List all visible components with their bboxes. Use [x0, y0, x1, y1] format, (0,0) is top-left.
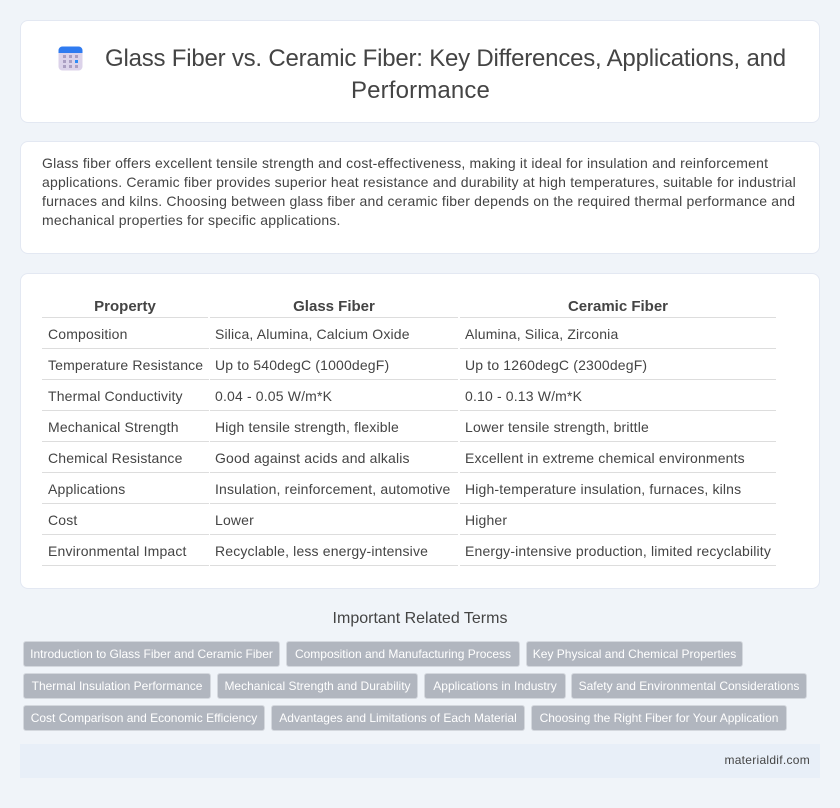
table row: environmental impact: Energy-intensive production, limited recyclability	[465, 543, 771, 559]
table row: temperature resistance	[42, 357, 776, 380]
table row: temperature resistance: Temperature Resistance	[48, 357, 203, 373]
table row: applications: High-temperature insulation, furnaces, kilns	[465, 481, 741, 497]
tag	[526, 641, 743, 667]
table row: cost: Cost	[48, 512, 77, 528]
text block: introduction paragraph: Glass fiber offers excellent tensile strength and cost-effectiveness, making it ideal for insulation and reinforcement	[42, 155, 768, 171]
text block: introduction paragraph	[42, 155, 796, 228]
footer source text: materialdif.com	[724, 753, 810, 767]
tag: Composition and Manufacturing Process	[295, 647, 511, 661]
tag: Key Physical and Chemical Properties	[533, 647, 736, 661]
table row: temperature resistance: Up to 1260degC (2300degF)	[465, 357, 647, 373]
tag: Introduction to Glass Fiber and Ceramic Fiber	[30, 647, 273, 661]
text block: introduction paragraph: applications. Ceramic fiber provides superior heat resistance and durability at high temperatures, suitable for industrial	[42, 174, 796, 190]
table row: temperature resistance: Up to 540degC (1000degF)	[215, 357, 389, 373]
table row: composition: Composition	[48, 326, 128, 342]
table row: mechanical strength: Lower tensile strength, brittle	[465, 419, 649, 435]
table row: environmental impact	[42, 543, 776, 566]
table row: mechanical strength: Mechanical Strength	[48, 419, 179, 435]
table row: mechanical strength	[42, 419, 776, 442]
title: Performance	[351, 77, 490, 104]
icon: calendar	[58, 46, 82, 70]
text block: introduction paragraph: mechanical properties for specific applications.	[42, 212, 341, 228]
table row: cost	[42, 512, 776, 535]
table row: cost: Higher	[465, 512, 507, 528]
table row: environmental impact: Recyclable, less energy-intensive	[215, 543, 428, 559]
table row: chemical resistance	[42, 450, 776, 473]
tag	[23, 673, 211, 699]
table row: cost: Lower	[215, 512, 254, 528]
tag: Safety and Environmental Considerations	[579, 679, 799, 693]
tag: Choosing the Right Fiber for Your Application	[540, 711, 778, 725]
table row: composition	[42, 326, 776, 349]
tag	[23, 705, 265, 731]
tag	[571, 673, 807, 699]
table row: applications: Applications	[48, 481, 125, 497]
table row: thermal conductivity: 0.10 - 0.13 W/m*K	[465, 388, 582, 404]
table header	[42, 298, 776, 318]
table row: applications	[42, 481, 776, 504]
table header: Ceramic Fiber	[568, 298, 668, 315]
tag: Applications in Industry	[433, 679, 557, 693]
tag	[286, 641, 520, 667]
tag: Thermal Insulation Performance	[32, 679, 202, 693]
table row: thermal conductivity: Thermal Conductivity	[48, 388, 183, 404]
title	[105, 45, 786, 104]
tag	[23, 641, 280, 667]
related terms tags	[23, 641, 807, 731]
footer bar	[20, 744, 820, 778]
table row: applications: Insulation, reinforcement, automotive	[215, 481, 450, 497]
heading: important related terms: Important Related Terms	[333, 610, 507, 627]
tag	[531, 705, 787, 731]
table row: environmental impact: Environmental Impact	[48, 543, 187, 559]
table header: Property	[94, 298, 156, 315]
table row: thermal conductivity: 0.04 - 0.05 W/m*K	[215, 388, 332, 404]
table row: chemical resistance: Excellent in extreme chemical environments	[465, 450, 745, 466]
table row: composition: Silica, Alumina, Calcium Oxide	[215, 326, 410, 342]
table header: Glass Fiber	[293, 298, 375, 315]
tag: Mechanical Strength and Durability	[224, 679, 411, 693]
tag	[217, 673, 418, 699]
tag	[271, 705, 525, 731]
panel: comparison table	[20, 273, 820, 589]
table row: chemical resistance: Good against acids and alkalis	[215, 450, 410, 466]
tag: Advantages and Limitations of Each Material	[279, 711, 517, 725]
table row: composition: Alumina, Silica, Zirconia	[465, 326, 618, 342]
tag: Cost Comparison and Economic Efficiency	[31, 711, 257, 725]
tag	[424, 673, 566, 699]
table row: mechanical strength: High tensile strength, flexible	[215, 419, 399, 435]
table row: thermal conductivity	[42, 388, 776, 411]
table row: chemical resistance: Chemical Resistance	[48, 450, 183, 466]
text block: introduction paragraph: furnaces and kilns. Choosing between glass fiber and ceramic fiber depends on the required thermal performance and	[42, 193, 795, 209]
title: Glass Fiber vs. Ceramic Fiber: Key Differences, Applications, and	[105, 45, 786, 72]
panel: introduction	[20, 141, 820, 254]
panel: title header	[20, 20, 820, 123]
